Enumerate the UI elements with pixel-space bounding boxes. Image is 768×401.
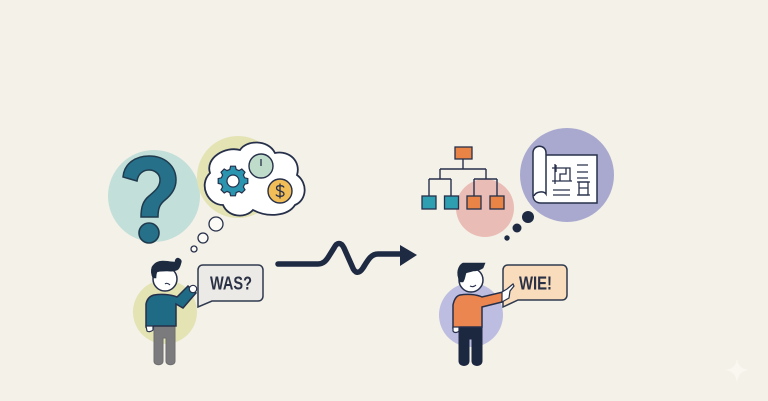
thought dots right <box>504 211 534 241</box>
hands <box>146 326 153 332</box>
speech bubble WIE: WIE! <box>519 274 552 294</box>
org chart on pink circle <box>422 147 514 237</box>
icon: gear <box>218 166 248 196</box>
sweater <box>146 286 196 327</box>
thought cloud with gear, clock and dollar <box>197 136 305 218</box>
trousers <box>154 326 175 365</box>
icon: dollar coin <box>268 179 292 203</box>
speech bubble WAS <box>198 265 263 307</box>
icon: clock <box>249 154 273 178</box>
sweater <box>453 292 503 328</box>
icon: question mark on teal circle <box>108 150 200 243</box>
trousers <box>459 327 482 366</box>
squiggle arrow <box>278 244 417 272</box>
thought bubbles left <box>191 217 223 252</box>
blueprint on purple circle <box>520 128 614 222</box>
hair <box>458 263 485 282</box>
hands <box>453 327 459 332</box>
head <box>459 268 483 292</box>
head <box>153 267 177 291</box>
speech bubble WIE <box>503 265 567 307</box>
hair <box>151 258 181 278</box>
person explaining WIE <box>439 263 514 366</box>
person asking WAS <box>133 258 197 365</box>
sparkle watermark <box>725 358 749 383</box>
speech bubble WAS: WAS? <box>210 274 252 294</box>
